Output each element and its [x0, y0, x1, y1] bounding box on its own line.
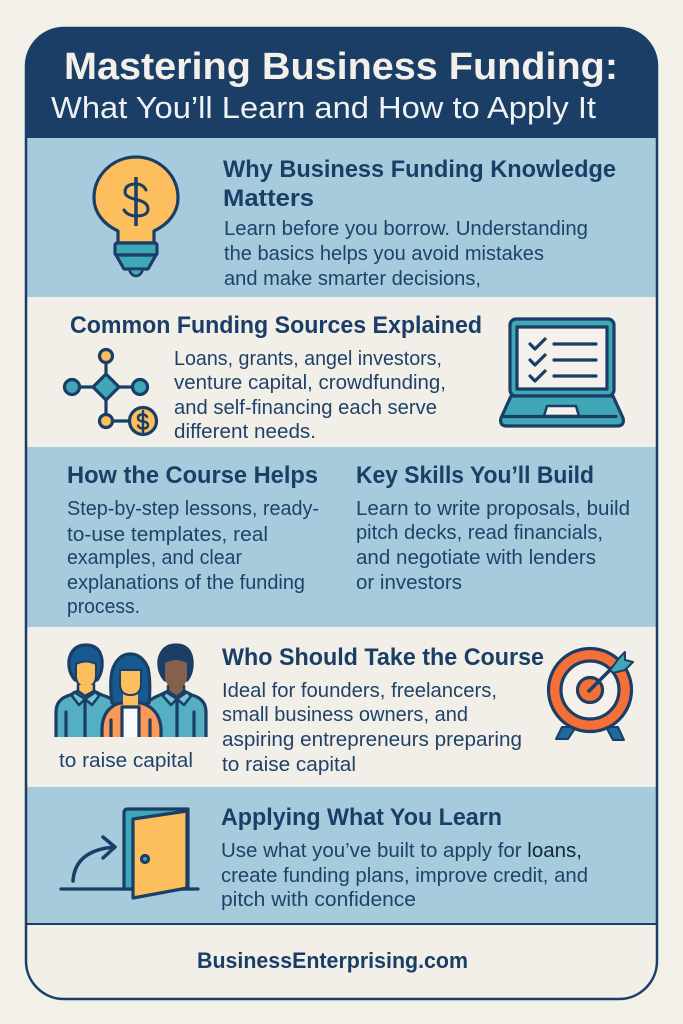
column: key skills: and negotiate with lenders — [356, 547, 596, 569]
body text: create funding plans, improve credit, and — [221, 865, 588, 887]
panel: course help and skills — [26, 447, 657, 627]
icon: open door with arrow — [61, 809, 198, 898]
body text: aspiring entrepreneurs preparing — [222, 729, 522, 751]
body text: pitch with confidence — [221, 889, 416, 911]
icon: light bulb with dollar — [94, 157, 178, 276]
column: key skills: pitch decks, read financials, — [356, 522, 603, 544]
body text: Learn before you borrow. Understanding — [224, 218, 588, 240]
icon caption: to raise capital — [59, 750, 193, 772]
column: key skills: or investors — [356, 572, 462, 594]
icon: target with arrow — [548, 648, 633, 740]
panel: header — [26, 28, 657, 138]
column: how the course helps: examples, and clear — [67, 547, 242, 569]
body text: and make smarter decisions, — [224, 268, 481, 290]
body text — [221, 840, 588, 911]
body text: the basics helps you avoid mistakes — [224, 243, 544, 265]
heading: Applying What You Learn — [221, 804, 502, 831]
heading: Who Should Take the Course — [222, 644, 544, 671]
body text: Use what you’ve built to apply for loans, — [221, 840, 582, 862]
column: how the course helps: How the Course Helps — [67, 462, 318, 489]
panel: applying what you learn — [26, 787, 657, 924]
column: how the course helps: to-use templates, real — [67, 524, 268, 546]
icon: three people — [56, 645, 206, 745]
heading: Common Funding Sources Explained — [70, 312, 482, 339]
icon: funding network — [64, 350, 156, 434]
panel: who should take the course — [54, 643, 634, 775]
body text — [224, 218, 588, 290]
panel: funding sources — [62, 316, 625, 438]
column: key skills: Key Skills You’ll Build — [356, 462, 594, 489]
body text: small business owners, and — [222, 704, 468, 726]
panel: footer — [27, 923, 656, 972]
body text: to raise capital — [222, 754, 356, 776]
body text: different needs. — [174, 421, 316, 443]
column: how the course helps: process. — [67, 596, 140, 618]
body text — [174, 348, 446, 443]
body text: venture capital, crowdfunding, — [174, 372, 446, 394]
heading: Why Business Funding Knowledge — [223, 156, 616, 183]
panel: why knowledge matters: Matters — [223, 185, 314, 212]
body text: and self-financing each serve — [174, 397, 437, 419]
panel: why knowledge matters — [26, 138, 657, 297]
title: Mastering Business Funding: — [64, 46, 618, 88]
subtitle: What You’ll Learn and How to Apply It — [51, 90, 596, 125]
column: how the course helps: explanations of the funding — [67, 572, 305, 594]
icon: laptop checklist — [501, 319, 623, 426]
column: key skills: Learn to write proposals, build — [356, 498, 630, 520]
footer website: BusinessEnterprising.com — [197, 948, 468, 973]
body text: Loans, grants, angel investors, — [174, 348, 442, 370]
column: how the course helps: Step-by-step lessons, ready- — [67, 498, 319, 520]
body text — [222, 680, 522, 776]
body text: Ideal for founders, freelancers, — [222, 680, 497, 702]
column: how the course helps — [67, 462, 319, 618]
column: key skills — [356, 462, 630, 594]
